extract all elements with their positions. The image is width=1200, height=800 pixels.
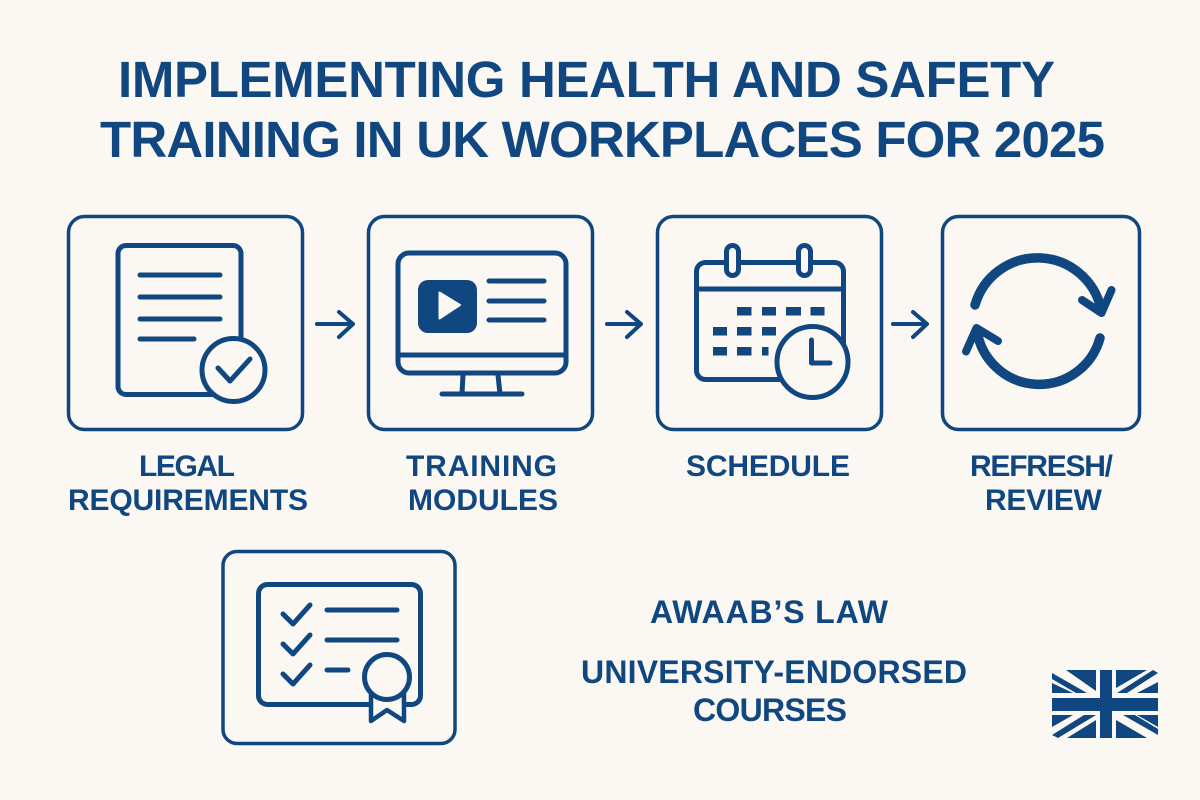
title: [100, 51, 1105, 168]
text: university-endorsed courses: [581, 654, 967, 728]
label: refresh and review: [970, 450, 1114, 517]
label: legal requirements: LEGAL: [139, 450, 235, 483]
panel: schedule: [658, 216, 882, 430]
label: training modules: MODULES: [408, 484, 558, 517]
panel: training modules: [368, 216, 592, 430]
icon: monitor with video: [398, 253, 566, 394]
label: refresh and review: REVIEW: [985, 484, 1103, 517]
panel: legal requirements: [68, 216, 302, 430]
arrow: legal to training: [317, 312, 353, 337]
icon: circular arrows: [966, 258, 1112, 384]
text: university-endorsed courses: COURSES: [693, 692, 847, 728]
icon: UK flag: [1052, 670, 1158, 738]
label: training modules: [406, 450, 558, 517]
label: schedule: SCHEDULE: [686, 450, 850, 483]
label: legal requirements: [68, 450, 308, 517]
label: refresh and review: REFRESH/: [970, 450, 1114, 483]
arrow: training to schedule: [607, 312, 641, 337]
label: legal requirements: REQUIREMENTS: [68, 484, 308, 517]
label: training modules: TRAINING: [406, 450, 557, 483]
text: university-endorsed courses: UNIVERSITY-ENDORSED: [581, 654, 967, 690]
panel: refresh and review: [942, 216, 1140, 430]
icon: certificate checklist with rosette: [258, 584, 420, 721]
text: Awaab's Law: AWAAB’S LAW: [650, 594, 889, 630]
icon: document with check mark: [118, 246, 265, 402]
panel: certificate: [223, 552, 455, 744]
icon: calendar with clock: [696, 246, 848, 398]
title: IMPLEMENTING HEALTH AND SAFETY: [118, 51, 1055, 108]
title: TRAINING IN UK WORKPLACES FOR 2025: [100, 111, 1105, 168]
arrow: schedule to refresh: [893, 312, 927, 337]
